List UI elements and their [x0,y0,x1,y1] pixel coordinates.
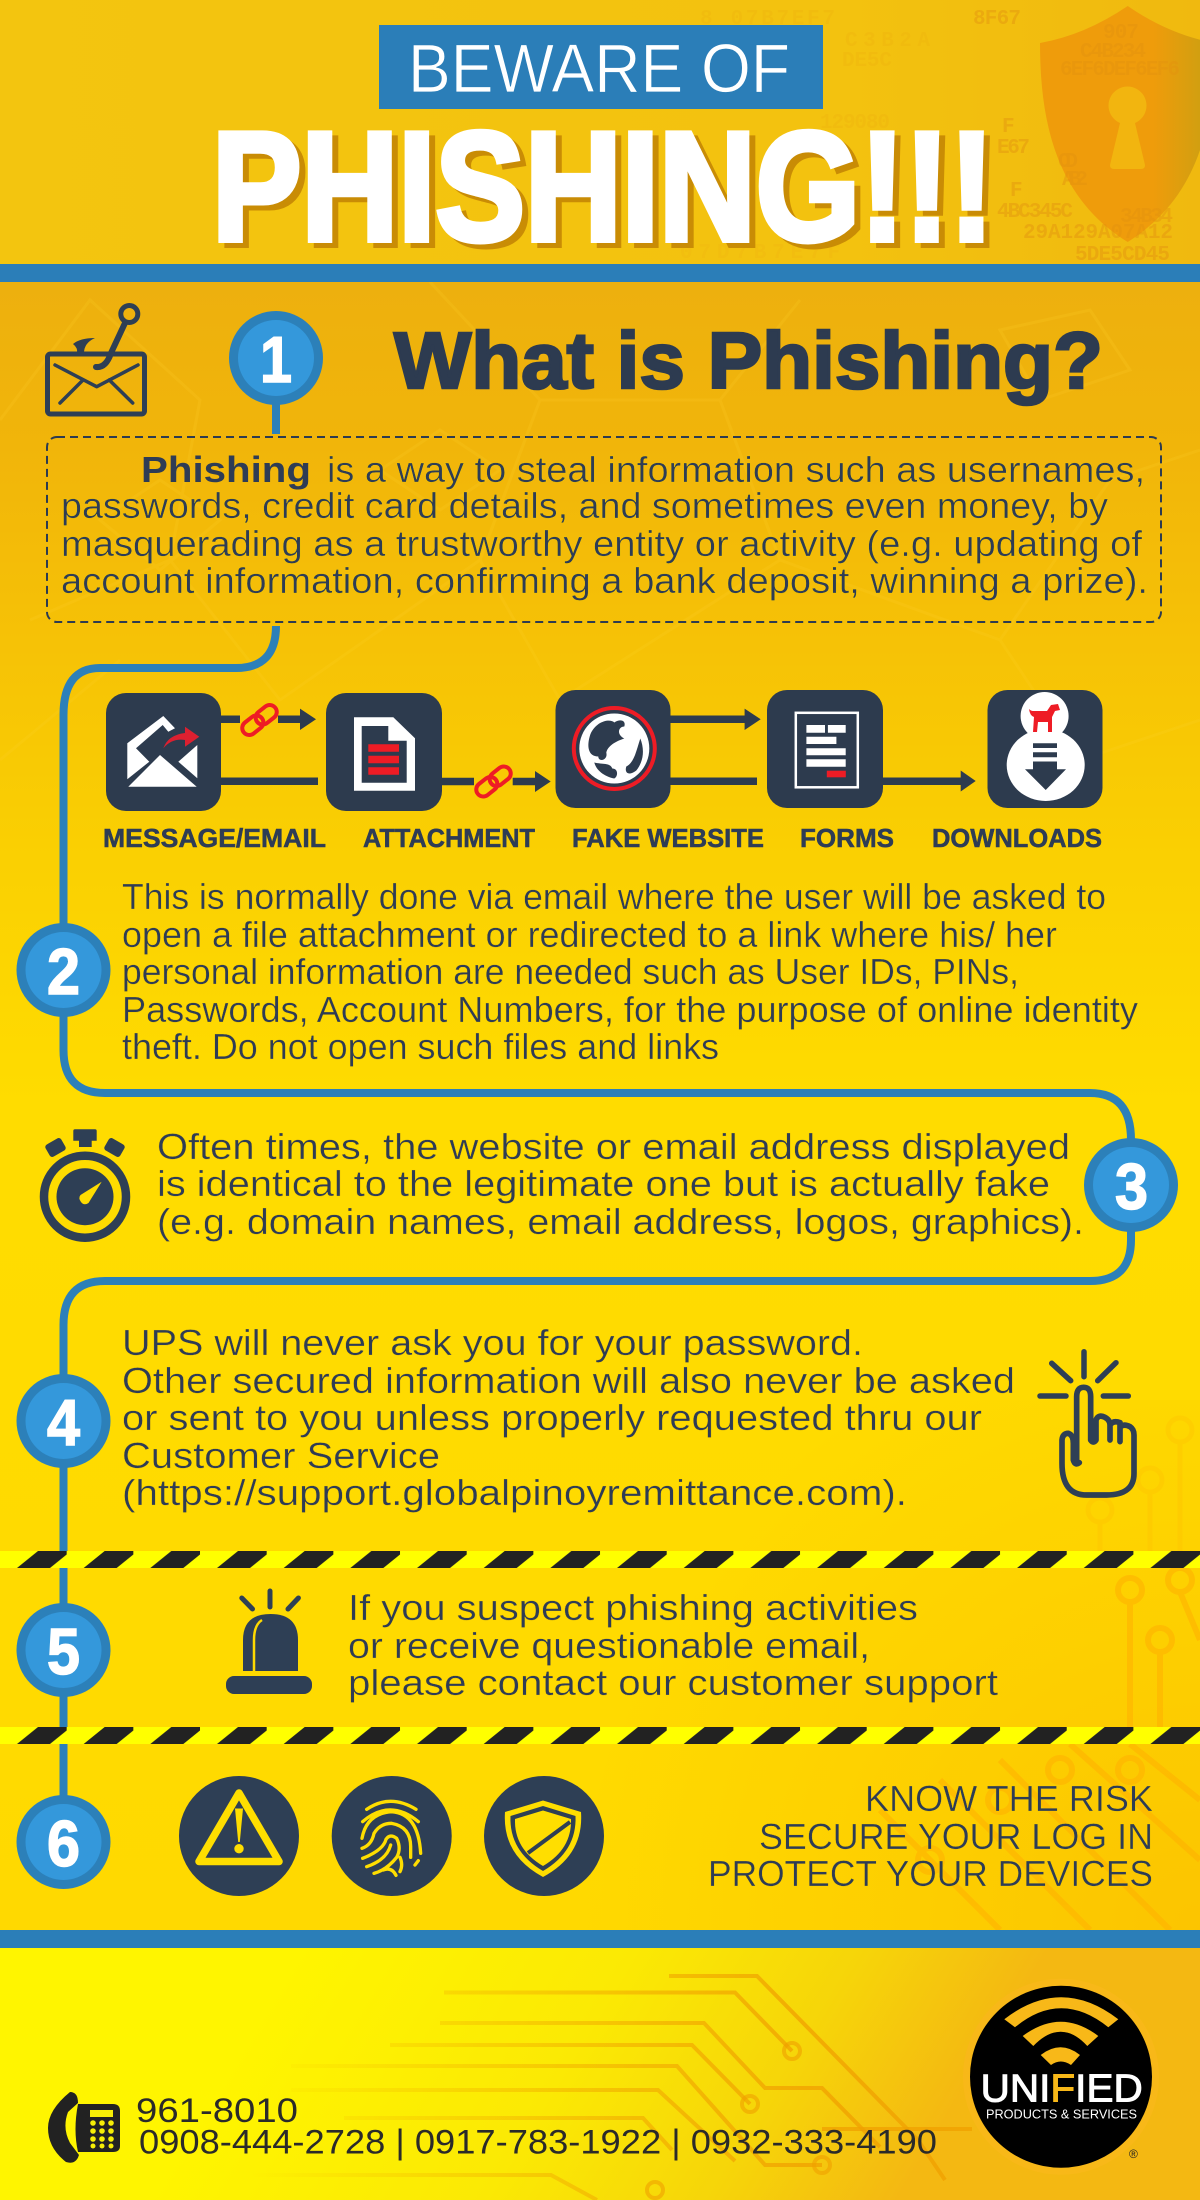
background: hex code letters: C3B2A [845,30,930,53]
background pattern: footer circuit traces [115,1976,972,2200]
text block: step 3: is identical to the legitimate one but is actually fake [157,1163,1050,1204]
background pattern: circuit traces right [880,1568,1200,1930]
icon: shield [484,1776,604,1896]
flow arrows: message to attachment [220,709,318,785]
background: hex code letters: F [1010,180,1023,203]
background pattern: footer circuit nodes [647,2043,830,2198]
text block: step 3 [157,1126,1084,1242]
icon: hook and envelope [48,306,144,414]
text block: step 3: (e.g. domain names, email address, logos, graphics). [157,1201,1084,1242]
logo: unified products and services: PRODUCTS & SERVICES [986,2107,1137,2121]
background: hex code letters: 34B34 [1120,206,1173,229]
icon: message email [106,693,221,811]
band: top blue divider [0,264,1200,282]
icon: stopwatch [44,1129,126,1238]
step badge 4 [16,1374,110,1468]
flow labels: MESSAGE/EMAIL [103,825,326,853]
step badge 4: 4 [47,1386,80,1459]
contact numbers [136,2092,937,2162]
icon: downloads [988,690,1102,808]
text block: step 2 [122,876,1139,1067]
panel: definition box: Phishing [141,449,311,490]
flow labels [103,825,1102,853]
icon: warning triangle [179,1776,299,1896]
band: bottom blue divider [0,1930,1200,1948]
contact numbers: 961-8010 [136,2092,298,2130]
background: header [0,0,1200,264]
step badge 2: 2 [47,935,80,1008]
logo: unified products and services: ® [1129,2147,1138,2161]
title banner: beware of: BEWARE OF [408,30,790,107]
timeline connector: circle 1 to box [272,358,280,434]
background: hex code letters: 8F67 [973,8,1021,31]
contact numbers: 0908-444-2728 | 0917-783-1922 | 0932-333-4190 [139,2124,937,2162]
background: hex code letters: 8 07B7EF7 [700,8,835,31]
icon: chain link 1 [239,702,280,738]
background: footer [0,1948,1200,2200]
text block: step 2: This is normally done via email where the user will be asked to [122,876,1106,917]
text block: step 5: please contact our customer support [348,1662,998,1703]
title: phishing: PHISHING!!! [212,100,994,273]
text block: step 2: personal information are needed such as User IDs, PINs, [122,951,1019,992]
text block: step 4: UPS will never ask you for your password. [122,1322,863,1363]
text block: step 3: Often times, the website or email address displayed [157,1126,1070,1167]
step badge 1: 1 [260,323,292,396]
text block: step 4: or sent to you unless properly requested thru our [122,1397,982,1438]
text block: step 6 slogans [708,1778,1153,1894]
flow labels: FORMS [800,825,894,853]
text block: step 2: Passwords, Account Numbers, for the purpose of online identity [122,989,1139,1030]
step badge 3 [1084,1138,1178,1232]
panel: definition box: masquerading as a trustworthy entity or activity (e.g. updating of [61,523,1143,564]
background pattern: faint circuit loops [1088,1418,1192,1551]
text block: step 2: open a file attachment or redirected to a link where his/ her [122,914,1057,955]
icon: telephone [48,2092,120,2163]
background: hex code letters: 29A129A07A12 [1023,222,1173,245]
background: hex code letters: F [1002,116,1015,139]
hazard stripe 2 [0,1727,1200,1744]
icon: fingerprint [332,1776,452,1896]
background: hex code letters: CD [1058,151,1078,174]
background: main content area [0,282,1200,1930]
text block: step 4: Other secured information will also never be asked [122,1360,1015,1401]
text block: step 2: theft. Do not open such files and links [122,1026,719,1067]
icon: fake website globe [556,690,670,808]
step badge 1 [229,311,323,405]
background: hex code letters: C4B234 [1080,41,1146,64]
background pattern: hexagon network [0,282,1200,760]
flow arrow: forms to downloads [883,770,976,792]
heading: what is phishing: What is Phishing? [394,316,1103,405]
text block: step 6 slogans: SECURE YOUR LOG IN [759,1816,1153,1857]
background: hex code letters: 6EF6DEF6EF6 [1060,59,1180,82]
title: phishing: PHISHING!!! [218,105,1000,278]
icon: alarm beacon [226,1591,312,1694]
icon: chain link 2 [473,764,514,799]
timeline connector: steps 2 to 6 [64,626,1131,1842]
text block: step 5: or receive questionable email, [348,1625,870,1666]
background: corner glow [500,1400,1200,1930]
step badge 3: 3 [1115,1150,1148,1223]
flow labels: DOWNLOADS [932,825,1102,853]
background: hex code letters: 129080 [820,112,890,135]
text block: step 4 [122,1322,1015,1513]
flow arrows: fake website to forms [670,709,761,785]
panel: definition box: passwords, credit card details, and sometimes even money, by [61,485,1109,526]
text block: step 5: If you suspect phishing activities [348,1587,918,1628]
panel: definition box: is a way to steal information such as usernames, [327,449,1145,490]
background: hex code letters: 07D7B7E7F [680,242,840,265]
step badge 6 [16,1795,110,1889]
step badge 5 [16,1603,110,1697]
icon: attachment [326,693,442,811]
text block: step 5 [348,1587,998,1703]
icon: forms [767,690,883,808]
background: hex code letters: 4BC345C [997,201,1073,224]
logo: unified products and services: UNIFIED [981,2068,1143,2111]
flow labels: ATTACHMENT [363,825,535,853]
background: hex code letters: 5DE5CD45 [1075,244,1170,267]
step badge 6: 6 [47,1807,80,1880]
flow labels: FAKE WEBSITE [572,825,764,853]
text block: step 4: Customer Service [122,1435,440,1476]
step badge 2 [16,923,110,1017]
background: hex code letters: AB2 [1062,169,1088,192]
hazard stripe 1 [0,1551,1200,1568]
flow arrow: attachment to fake website [441,771,551,792]
step badge 5: 5 [47,1615,80,1688]
text block: step 4: (https://support.globalpinoyremittance.com). [122,1472,907,1513]
icon: pointing hand [1040,1352,1134,1495]
background: hex code letters: 907 [1103,22,1139,45]
logo: unified products and services [963,1979,1159,2175]
text block: step 6 slogans: PROTECT YOUR DEVICES [708,1853,1153,1894]
panel: definition box [47,437,1161,622]
background: hex code letters [680,8,1180,267]
background: hex code letters: E67 [997,137,1030,160]
text block: step 6 slogans: KNOW THE RISK [865,1778,1153,1819]
panel: definition box: account information, confirming a bank deposit, winning a prize). [61,560,1148,601]
icon: background shield [1040,6,1200,242]
background: hex code letters: DE5C [842,50,892,73]
